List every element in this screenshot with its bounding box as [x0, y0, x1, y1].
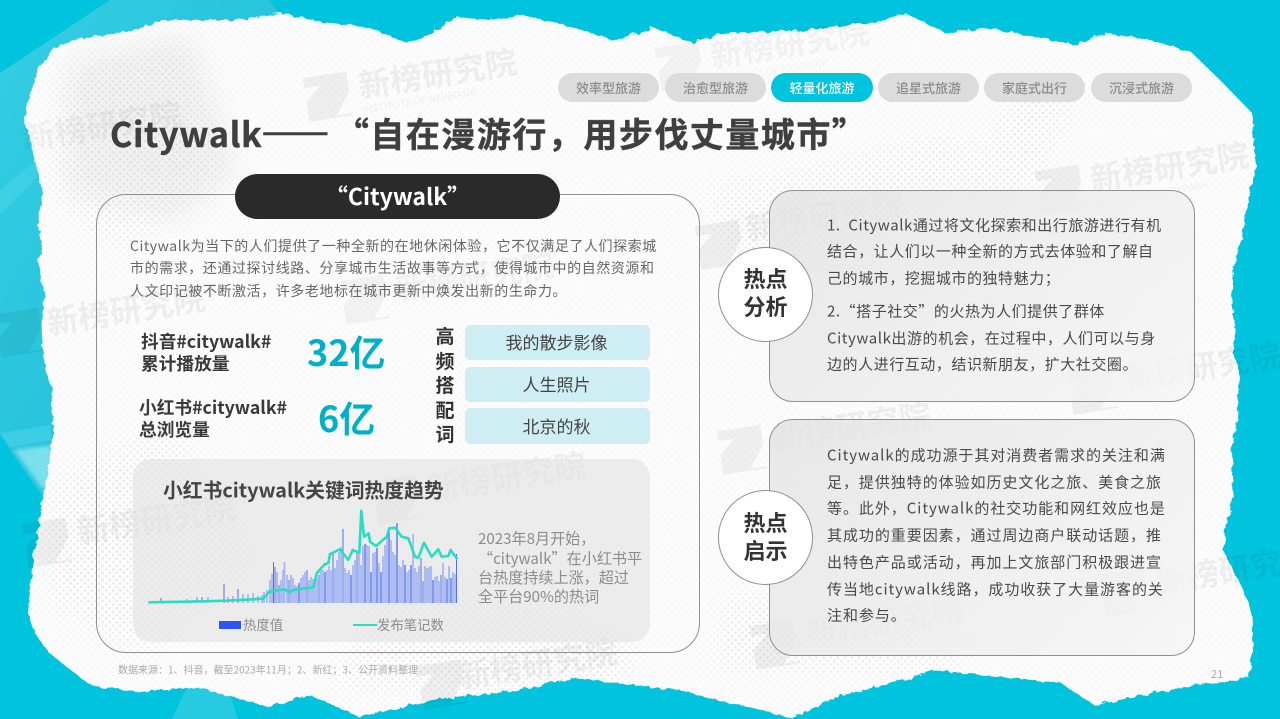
high-frequency words label: 频	[435, 347, 454, 374]
watermarks: 新榜研究院	[19, 89, 185, 160]
热点启示 text	[827, 444, 1166, 626]
热点启示 text: Citywalk的成功源于其对消费者需求的关注和满	[827, 444, 1166, 466]
title: Citywalk——“自在漫游行，用步伐丈量城市”	[110, 108, 867, 157]
stat: 抖音 label	[141, 328, 271, 376]
watermarks: 新榜研究院	[43, 274, 208, 344]
tag: 我的散步影像: 我的散步影像	[506, 329, 608, 354]
high-frequency words label: 高	[435, 322, 454, 349]
watermarks: 新榜研究院	[455, 627, 620, 698]
high-frequency words label: 搭	[435, 371, 454, 398]
badge: 热点启示	[718, 490, 813, 585]
tab: 效率型旅游: 效率型旅游	[576, 78, 641, 97]
热点启示 text: 其成功的重要因素，通过周边商户联动话题，推	[827, 524, 1162, 546]
tab navigation	[558, 73, 1192, 102]
chart legend	[219, 614, 445, 634]
热点启示 text: 注和参与。	[827, 604, 907, 626]
watermarks: 新榜研究院	[424, 440, 589, 511]
stat: 抖音 value: 32亿	[307, 325, 385, 377]
watermarks: 新榜研究院	[707, 7, 872, 78]
badge: 热点分析	[718, 247, 813, 342]
tag: 人生照片	[465, 367, 650, 402]
tab: 沉浸式旅游	[1091, 73, 1192, 102]
tab: 追星式旅游	[878, 73, 979, 102]
watermarks: INSTITUTE OF NEWRANK	[713, 53, 830, 86]
tab: 治愈型旅游	[665, 73, 766, 102]
tab: 效率型旅游	[558, 73, 659, 102]
intro paragraph: 人文印记被不断激活，许多老地标在城市更新中焕发出新的生命力。	[130, 281, 567, 301]
chart annotation: 2023年8月开始，	[478, 527, 595, 549]
热点启示 text: 等。此外，Citywalk的社交功能和网红效应也是	[827, 498, 1166, 518]
tab: 沉浸式旅游: 沉浸式旅游	[1109, 78, 1174, 97]
watermarks: 新榜研究院	[802, 585, 967, 656]
data source footnote: 数据来源：1、抖音，截至2023年11月；2、新红；3、公开资料整理	[118, 662, 418, 676]
chart annotation	[478, 527, 642, 607]
stat: 小红书 label: 总浏览量	[139, 416, 210, 442]
热点启示 text: 足，提供独特的体验如历史文化之旅、美食之旅	[827, 472, 1162, 492]
intro paragraph	[130, 236, 657, 301]
intro paragraph: Citywalk为当下的人们提供了一种全新的在地休闲体验，它不仅满足了人们探索城	[130, 236, 657, 256]
watermarks: INSTITUTE OF NEWRANK	[361, 83, 478, 116]
watermarks: 新榜研究院	[355, 37, 520, 108]
tag: 人生照片: 人生照片	[522, 371, 590, 396]
chart annotation: 全平台90%的热词	[478, 585, 599, 607]
high-frequency words label: 配	[435, 396, 454, 423]
watermarks: INSTITUTE OF NEWRANK	[1093, 176, 1210, 209]
watermarks: 新榜研究院	[1087, 130, 1252, 201]
tab: 追星式旅游: 追星式旅游	[896, 78, 961, 97]
热点分析 text	[827, 214, 1162, 374]
热点分析 text: 己的城市，挖掘城市的独特魅力；	[827, 268, 1060, 288]
panel: 热点分析	[769, 190, 1195, 402]
stat: 抖音 label: 累计播放量	[141, 350, 229, 376]
热点分析 text: 1. Citywalk通过将文化探索和出行旅游进行有机	[827, 214, 1162, 236]
热点分析 text: Citywalk出游的机会，在过程中，人们可以与身	[827, 328, 1156, 348]
watermarks: 新榜研究院	[392, 240, 557, 311]
tab: 轻量化旅游 (active)	[771, 73, 873, 102]
stat: 小红书 value: 6亿	[318, 391, 375, 443]
page number: 21	[1211, 666, 1223, 682]
chart annotation: 台热度持续上涨，超过	[478, 566, 629, 588]
chart annotation: “citywalk”在小红书平	[478, 547, 642, 569]
tab: 轻量化旅游 (active): 轻量化旅游	[789, 78, 854, 97]
tag: 北京的秋	[465, 408, 650, 444]
stat: 小红书 label: 小红书#citywalk#	[139, 394, 287, 420]
tab: 家庭式出行	[984, 73, 1085, 102]
badge: 热点启示: 启示	[743, 534, 788, 566]
热点分析 text: 结合，让人们以一种全新的方式去体验和了解自	[827, 240, 1154, 262]
badge: 热点分析: 分析	[743, 290, 788, 322]
chart legend: 热度值	[243, 614, 283, 634]
tag: 我的散步影像	[465, 325, 650, 360]
watermarks: 新榜研究院	[74, 483, 239, 554]
stat: 小红书 label	[139, 394, 287, 442]
tab: 治愈型旅游: 治愈型旅游	[683, 78, 748, 97]
panel heading pill	[235, 174, 560, 219]
热点启示 text: 出特色产品或活动，再加上文旅部门积极跟进宣	[827, 552, 1162, 572]
panel: Citywalk overview	[96, 194, 700, 653]
high-frequency words label	[435, 322, 454, 447]
badge: 热点启示: 热点	[743, 506, 788, 538]
panel: 热点启示	[769, 419, 1195, 656]
热点分析 text: 2.“搭子社交”的火热为人们提供了群体	[827, 300, 1105, 322]
热点分析 text: 边的人进行互动，结识新朋友，扩大社交圈。	[827, 354, 1138, 374]
bar and line chart	[148, 509, 458, 604]
watermarks: 新榜研究院	[769, 390, 934, 461]
tag: 北京的秋: 北京的秋	[522, 413, 590, 438]
watermarks: 新榜研究院	[1119, 330, 1280, 401]
high-frequency words label: 词	[435, 420, 454, 447]
badge: 热点分析: 热点	[743, 262, 788, 294]
stat: 抖音 label: 抖音#citywalk#	[141, 328, 271, 354]
tab: 家庭式出行: 家庭式出行	[1002, 78, 1067, 97]
panel: keyword trend	[133, 459, 650, 642]
chart title: 小红书citywalk关键词热度趋势	[163, 474, 444, 504]
chart legend: 发布笔记数	[377, 614, 445, 634]
intro paragraph: 市的需求，还通过探讨线路、分享城市生活故事等方式，使得城市中的自然资源和	[130, 258, 655, 278]
watermarks: 新榜研究院	[742, 180, 907, 250]
热点启示 text: 传当地citywalk线路，成功收获了大量游客的关	[827, 578, 1164, 600]
panel heading pill: “Citywalk”	[325, 178, 470, 212]
watermarks: INSTITUTE OF NEWRANK	[748, 226, 865, 259]
